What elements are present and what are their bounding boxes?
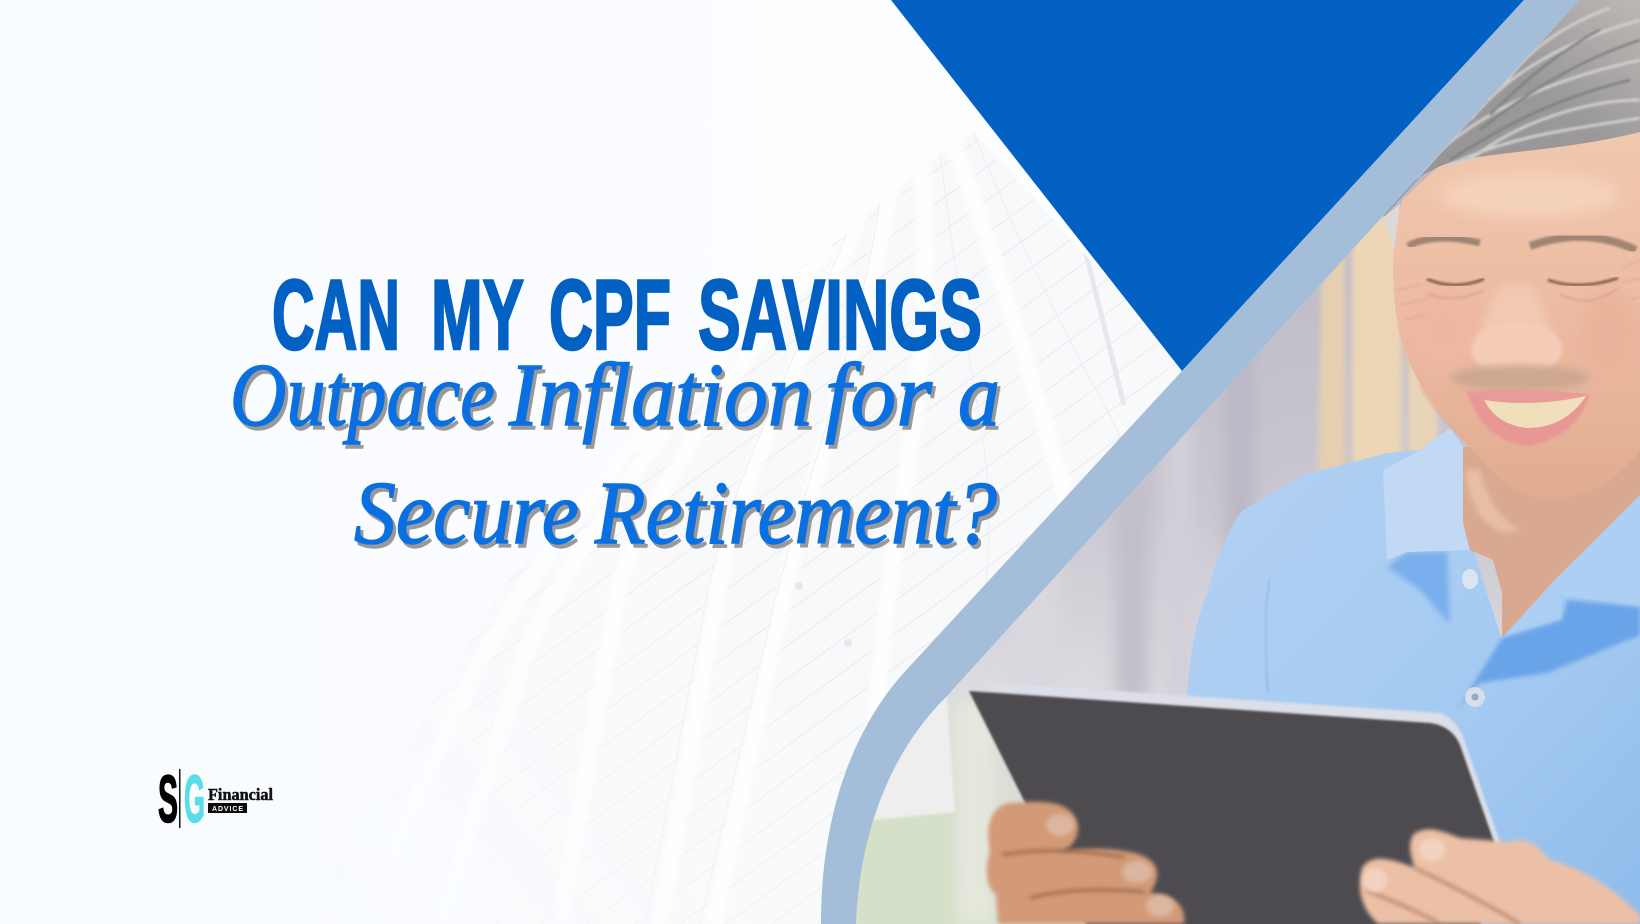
logo: SG Financial Advice xyxy=(158,762,273,837)
left collar xyxy=(1383,428,1470,560)
subtitle line 1 xyxy=(230,346,1000,445)
tablet xyxy=(969,682,1500,924)
blue triangle xyxy=(891,0,1524,371)
subtitle line 2 xyxy=(354,464,997,563)
shirt xyxy=(1180,428,1640,924)
mouth xyxy=(1467,390,1590,446)
logo tagline: ADVICE xyxy=(212,806,243,813)
title: CAN MY CPF SAVINGS: MY xyxy=(431,259,524,370)
right collar and lapel xyxy=(1457,495,1640,710)
title: CAN MY CPF SAVINGS: CPF xyxy=(549,259,671,370)
curved light blue band xyxy=(821,0,1579,924)
title: CAN MY CPF SAVINGS: CAN xyxy=(272,259,400,370)
background building xyxy=(436,132,1176,924)
shirt buttons xyxy=(1462,569,1485,707)
subtitle line 1: Inflation xyxy=(508,346,812,445)
logo wordmark: Financial xyxy=(208,785,273,804)
photo backdrop xyxy=(840,0,1640,924)
face xyxy=(1393,120,1640,500)
subtitle script xyxy=(230,346,1000,563)
title: CAN MY CPF SAVINGS xyxy=(272,259,982,370)
title: CAN MY CPF SAVINGS: SAVINGS xyxy=(698,259,982,370)
logo: SG Financial Advice: G xyxy=(184,762,205,837)
subtitle line 1: a xyxy=(958,346,1000,445)
neck xyxy=(1463,440,1640,638)
subtitle line 2: Retirement? xyxy=(594,464,997,563)
shadow under collar xyxy=(1387,552,1450,625)
subtitle line 2: Secure xyxy=(354,464,579,563)
subtitle line 1: Outpace xyxy=(230,346,495,445)
right hand xyxy=(1360,829,1640,924)
hair xyxy=(1383,0,1640,250)
left hand xyxy=(987,802,1184,924)
photo: smiling senior man reading a tablet xyxy=(840,0,1640,924)
logo: SG Financial Advice: S xyxy=(158,762,178,837)
subtitle line 1: for xyxy=(825,346,933,445)
